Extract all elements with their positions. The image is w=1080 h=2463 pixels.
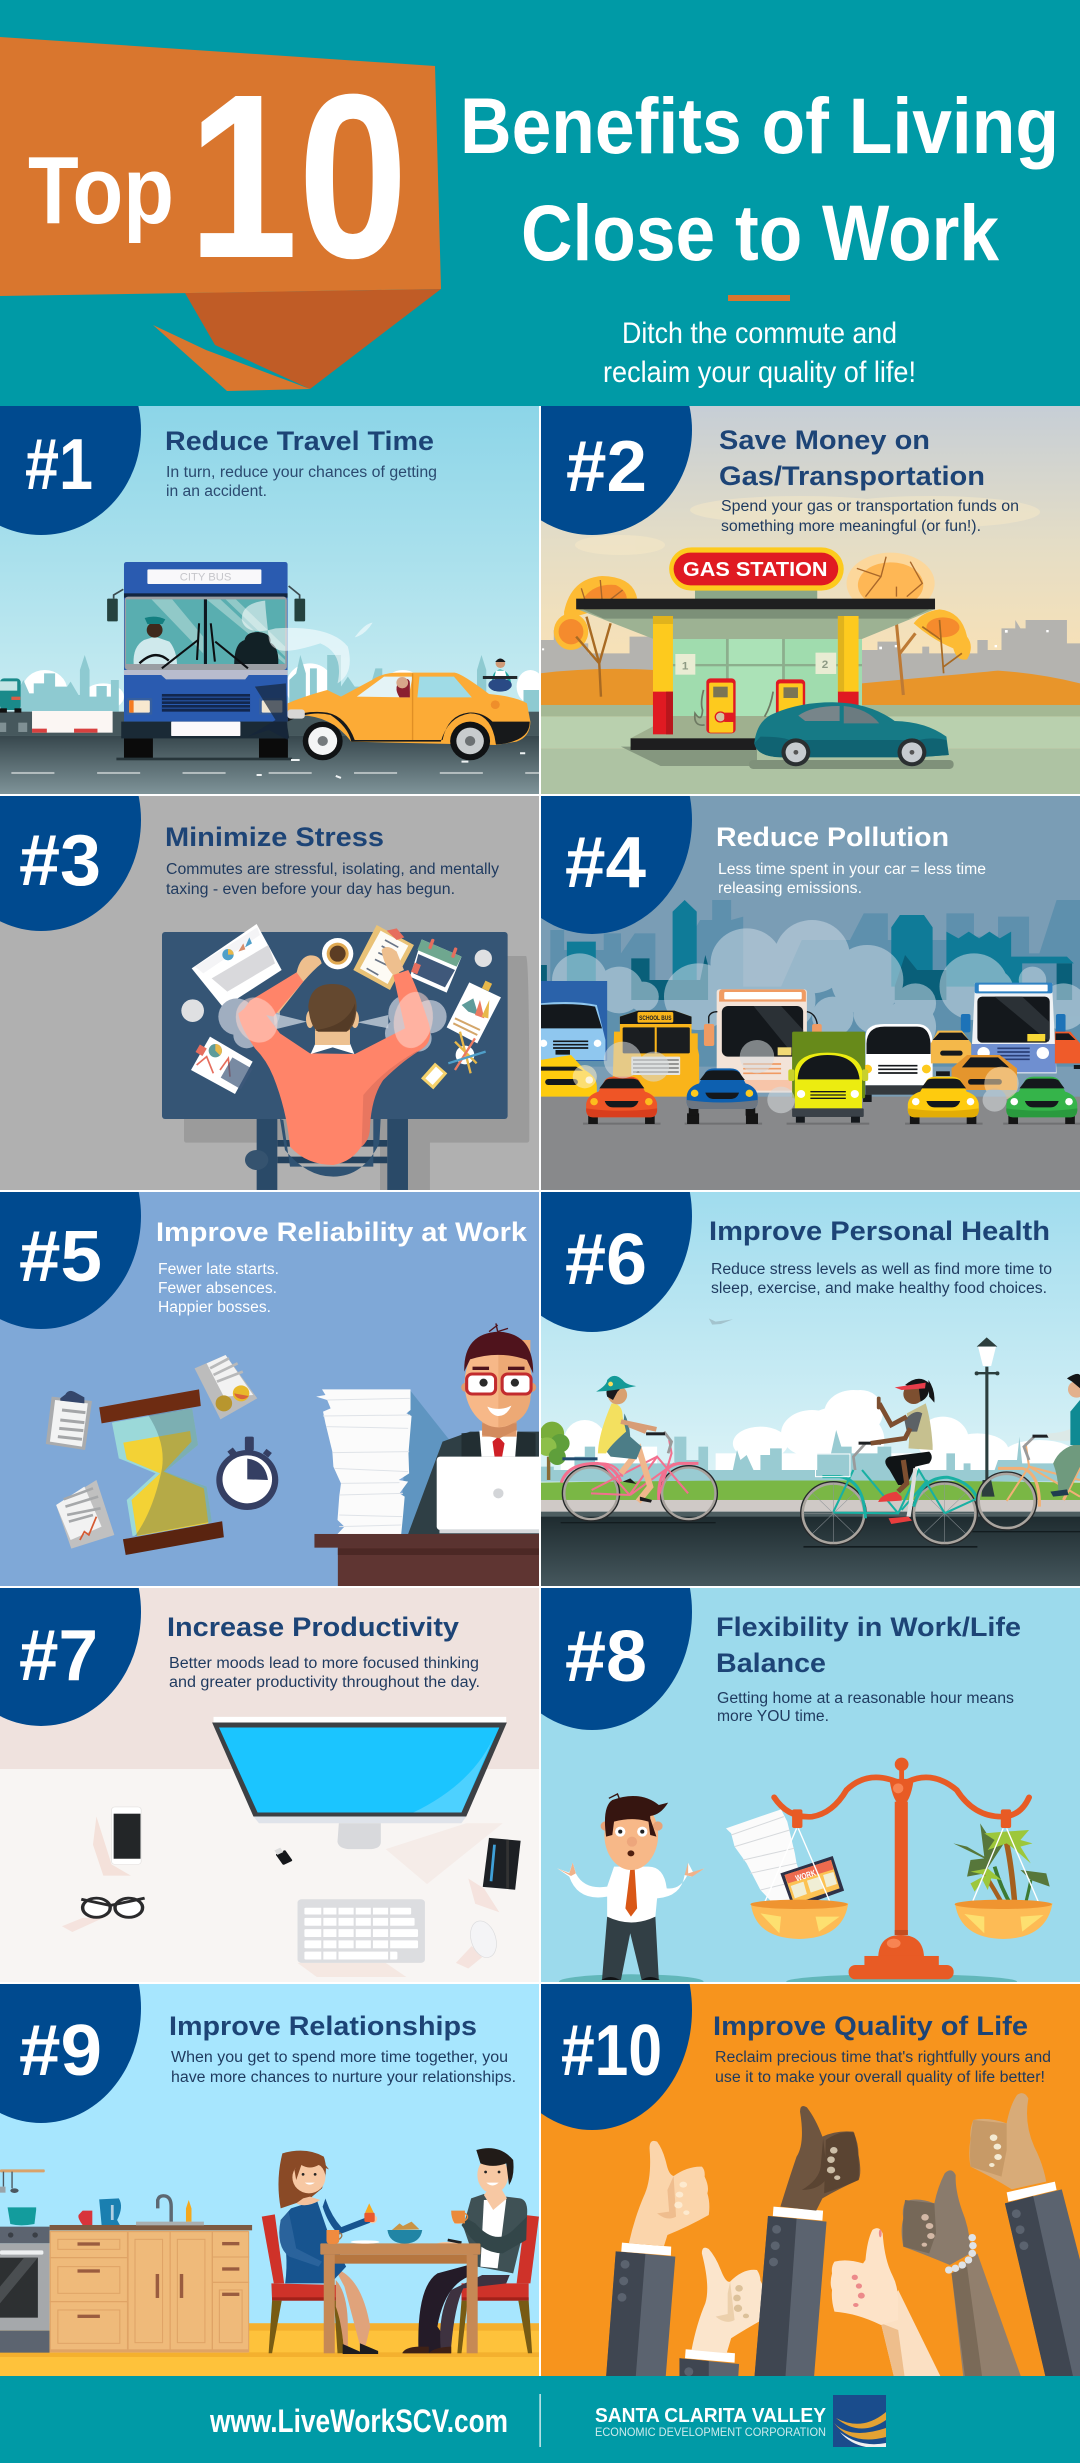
ribbon banner: Top bbox=[28, 137, 174, 244]
number badge: #3 bbox=[19, 821, 101, 901]
paper bbox=[56, 1480, 114, 1549]
heading: Reduce Pollution bbox=[716, 822, 949, 852]
barrier bbox=[32, 711, 113, 733]
panel: #7 increase productivity bbox=[0, 1498, 539, 1982]
subtitle bbox=[603, 317, 916, 389]
number badge bbox=[0, 406, 141, 535]
body text bbox=[158, 1261, 279, 1316]
body text: use it to make your overall quality of life better! bbox=[715, 2069, 1045, 2086]
body text bbox=[169, 1655, 480, 1691]
number badge bbox=[492, 1100, 692, 1332]
taxi left bbox=[540, 1050, 597, 1097]
panel: #6 improve personal health bbox=[492, 1100, 1080, 1587]
body text bbox=[166, 861, 499, 898]
panel: #8 work/life balance bbox=[492, 1494, 1080, 1989]
blue truck bbox=[540, 981, 607, 1061]
report paper bbox=[191, 1037, 253, 1094]
stove bbox=[0, 2207, 50, 2353]
ribbon banner bbox=[0, 37, 441, 391]
tablet bbox=[780, 1856, 844, 1909]
school bus: SCHOOL BUS bbox=[639, 1015, 672, 1022]
number badge: #8 bbox=[565, 1617, 647, 1697]
car bbox=[749, 702, 954, 769]
number badge bbox=[492, 706, 692, 934]
third rider bbox=[1046, 1374, 1080, 1497]
heading: Reduce Travel Time bbox=[165, 426, 434, 456]
panel: #3 minimize stress bbox=[0, 796, 539, 1190]
hand 4 bbox=[831, 2228, 942, 2380]
number badge bbox=[492, 1890, 692, 2130]
illustration: bus and car crash bbox=[0, 562, 544, 794]
number badge: #6 bbox=[565, 1220, 647, 1300]
hand 1 bbox=[606, 2141, 709, 2377]
calendar bbox=[410, 938, 462, 993]
notebook bbox=[468, 1838, 521, 1912]
hand 2 bbox=[679, 2248, 768, 2380]
body text: Less time spent in your car = less time bbox=[718, 861, 986, 878]
smoke bbox=[218, 995, 447, 1052]
monitor bbox=[212, 1717, 507, 1884]
school bus bbox=[612, 1011, 699, 1097]
cabinets bbox=[50, 2225, 252, 2353]
canopy bbox=[578, 609, 934, 639]
green truck bbox=[788, 1032, 868, 1124]
heading bbox=[716, 1612, 1021, 1678]
illustration: stressed worker at desk bbox=[162, 924, 529, 1190]
body text bbox=[721, 498, 1019, 535]
title bbox=[460, 81, 1059, 277]
forecourt bbox=[621, 747, 757, 766]
body text: in an accident. bbox=[166, 483, 267, 500]
clouds bbox=[575, 496, 1040, 555]
laptop bbox=[192, 924, 282, 1008]
number badge bbox=[541, 406, 692, 535]
panel: #1 reduce travel time bbox=[0, 406, 539, 794]
clipboard bbox=[353, 925, 414, 990]
office worker bbox=[408, 1323, 547, 1534]
usb drive bbox=[273, 1847, 293, 1865]
title: Close to Work bbox=[521, 188, 1000, 277]
tree bbox=[537, 1422, 570, 1480]
body text: more YOU time. bbox=[717, 1708, 829, 1725]
hourglass bbox=[99, 1389, 224, 1555]
pink bus bbox=[704, 989, 822, 1093]
number badge: #9 bbox=[19, 2011, 102, 2091]
number badge: #2 bbox=[566, 427, 647, 507]
body text bbox=[171, 2049, 516, 2086]
illustration: man and balance scale bbox=[557, 1758, 1052, 1989]
plane bbox=[709, 1318, 733, 1325]
rider in hat bbox=[596, 1376, 656, 1503]
tablet: WORK bbox=[794, 1868, 817, 1883]
panel: #2 save money bbox=[541, 406, 1080, 794]
heading: Improve Relationships bbox=[169, 2011, 477, 2041]
body text bbox=[167, 466, 436, 496]
man bbox=[557, 1794, 705, 1980]
keyboard bbox=[298, 1899, 425, 1977]
bay numbers: 2 bbox=[822, 659, 828, 671]
paper bbox=[195, 1355, 257, 1419]
glasses bbox=[62, 1898, 145, 1932]
hand 3 bbox=[754, 2106, 860, 2380]
website url: www.LiveWorkSCV.com bbox=[209, 2403, 508, 2439]
teal bike bbox=[801, 1442, 978, 1545]
motorbike rider bbox=[483, 658, 517, 692]
counter items bbox=[78, 2196, 204, 2225]
panel: #5 improve reliability bbox=[0, 1103, 547, 1587]
mouse bbox=[456, 1919, 500, 1969]
papers bbox=[726, 1809, 812, 1908]
fuel pumps bbox=[695, 678, 805, 733]
bay numbers: 1 bbox=[682, 660, 689, 672]
subtitle: Ditch the commute and bbox=[622, 317, 897, 350]
body text: Getting home at a reasonable hour means bbox=[717, 1690, 1014, 1707]
wall rail and utensils bbox=[0, 2169, 45, 2193]
subtitle: reclaim your quality of life! bbox=[603, 356, 916, 389]
hand 6 bbox=[969, 2093, 1080, 2380]
pencils and id card bbox=[421, 1032, 486, 1089]
pillars bbox=[653, 616, 859, 734]
number badge bbox=[0, 1103, 141, 1329]
desk bbox=[314, 1534, 541, 1587]
panel: #4 reduce pollution bbox=[492, 706, 1080, 1190]
heading: Save Money on bbox=[719, 425, 930, 455]
phone bbox=[93, 1807, 141, 1876]
organization name bbox=[595, 2405, 827, 2439]
hand 5 bbox=[902, 2170, 1022, 2380]
white van bbox=[863, 1024, 933, 1102]
heading: Flexibility in Work/Life bbox=[716, 1612, 1021, 1642]
illustration: thumbs up hands bbox=[606, 2093, 1080, 2380]
illustration: traffic jam and smog bbox=[540, 900, 1080, 1190]
sign: GAS STATION bbox=[683, 559, 828, 581]
body text: releasing emissions. bbox=[718, 880, 862, 897]
body text: Happier bosses. bbox=[158, 1299, 271, 1316]
panel: #10 improve quality of life bbox=[492, 1890, 1080, 2380]
body text bbox=[715, 2049, 1051, 2086]
body text: taxing - even before your day has begun. bbox=[166, 881, 455, 898]
number badge bbox=[0, 796, 141, 931]
table bbox=[320, 2222, 480, 2353]
number badge: #1 bbox=[25, 425, 93, 505]
illustration: desk with monitor bbox=[62, 1717, 521, 1977]
heading: Improve Personal Health bbox=[709, 1216, 1050, 1246]
body text: Commutes are stressful, isolating, and mentally bbox=[166, 861, 499, 878]
number badge: #7 bbox=[19, 1616, 98, 1696]
paper stack bbox=[316, 1389, 449, 1534]
body text: Fewer absences. bbox=[158, 1280, 277, 1297]
body text: Fewer late starts. bbox=[158, 1261, 279, 1278]
front cars bbox=[583, 1068, 1080, 1125]
person bbox=[280, 1119, 381, 1177]
small car bbox=[0, 678, 21, 713]
scale bbox=[750, 1758, 1052, 1979]
heading: Balance bbox=[716, 1648, 826, 1678]
lamp post bbox=[975, 1337, 999, 1497]
stopwatch bbox=[216, 1437, 278, 1510]
heading: Minimize Stress bbox=[165, 822, 384, 852]
bay numbers bbox=[675, 653, 836, 675]
illustration: hourglass and office worker bbox=[46, 1323, 547, 1587]
man bbox=[402, 2148, 527, 2353]
heading: Gas/Transportation bbox=[719, 461, 985, 491]
pink bike bbox=[561, 1432, 717, 1521]
chart paper bbox=[447, 981, 501, 1043]
driver bbox=[134, 637, 177, 664]
orange bike bbox=[977, 1435, 1080, 1530]
number badge: #4 bbox=[565, 823, 646, 903]
clipboard bbox=[46, 1391, 92, 1450]
body text: Reduce stress levels as well as find more time to bbox=[711, 1261, 1052, 1278]
number badge bbox=[0, 1893, 141, 2123]
body text: and greater productivity throughout the day. bbox=[169, 1674, 480, 1691]
header background bbox=[0, 0, 1080, 406]
number badge bbox=[492, 1494, 692, 1730]
bus bbox=[107, 562, 305, 760]
body text: When you get to spend more time together, you bbox=[171, 2049, 508, 2066]
illustration: gas station bbox=[540, 547, 1080, 795]
trees bbox=[554, 553, 971, 697]
crumpled paper bbox=[181, 950, 492, 1022]
body text bbox=[717, 1690, 1014, 1725]
back cars bbox=[931, 1031, 1080, 1090]
title divider bbox=[728, 295, 790, 301]
smoke bbox=[242, 601, 373, 683]
woman's chair bbox=[262, 2214, 344, 2353]
illustration: cyclists in the park bbox=[537, 1318, 1080, 1587]
right bus bbox=[961, 983, 1066, 1073]
taxi car bbox=[288, 673, 530, 760]
body text: have more chances to nurture your relationships. bbox=[171, 2069, 516, 2086]
bus: CITY BUS bbox=[180, 572, 232, 584]
man's chair bbox=[457, 2215, 539, 2353]
body text: Spend your gas or transportation funds on bbox=[721, 498, 1019, 515]
body text: Better moods lead to more focused thinking bbox=[169, 1655, 479, 1672]
body text: Reclaim precious time that's rightfully yours and bbox=[715, 2049, 1051, 2066]
body text bbox=[718, 861, 986, 897]
panel: #9 improve relationships bbox=[0, 1893, 540, 2380]
number badge bbox=[0, 1498, 141, 1726]
heading: Increase Productivity bbox=[167, 1612, 459, 1642]
illustration: couple in kitchen bbox=[0, 2148, 540, 2380]
body text: In turn, reduce your chances of getting bbox=[166, 464, 437, 481]
heading: Improve Reliability at Work bbox=[156, 1217, 528, 1247]
organization name: SANTA CLARITA VALLEY bbox=[595, 2405, 827, 2427]
number badge: #10 bbox=[561, 2011, 662, 2091]
body text: something more meaningful (or fun!). bbox=[721, 518, 981, 535]
organization name: ECONOMIC DEVELOPMENT CORPORATION bbox=[595, 2425, 826, 2439]
body text: sleep, exercise, and make healthy food choices. bbox=[711, 1280, 1047, 1297]
palm trees bbox=[953, 1823, 1050, 1910]
woman bbox=[278, 2151, 378, 2354]
coffee bbox=[322, 938, 353, 969]
sign bbox=[669, 547, 844, 591]
heading: Improve Quality of Life bbox=[713, 2011, 1028, 2041]
heading bbox=[719, 425, 985, 491]
footer bbox=[0, 2376, 1080, 2463]
logo bbox=[833, 2395, 886, 2447]
rider with visor bbox=[871, 1379, 934, 1524]
ribbon banner: 10 bbox=[188, 45, 408, 307]
body text bbox=[711, 1261, 1052, 1297]
number badge: #5 bbox=[19, 1217, 102, 1297]
